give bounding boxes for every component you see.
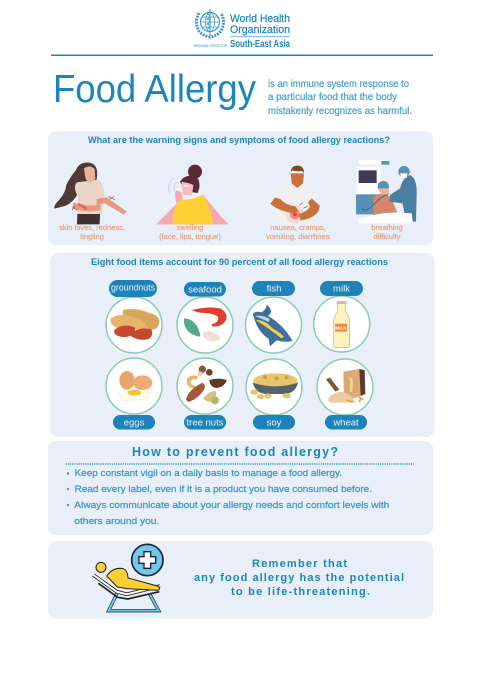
header: WHO logo: REGIONAL OFFICE FOR <box>194 44 227 48</box>
food labels: tree nuts <box>187 418 224 428</box>
symptom labels: (face, lips, tongue) <box>159 232 221 241</box>
symptom labels: difficulty <box>374 232 401 241</box>
header: WHO logo: Organization <box>230 24 290 36</box>
panel: prevention <box>48 441 433 535</box>
symptom labels: tingling <box>80 232 104 241</box>
icon: milk bottle: MILK <box>335 325 347 330</box>
reminder text: to be life-threatening. <box>231 586 370 598</box>
food labels: fish <box>267 284 281 294</box>
icon: groundnuts <box>110 309 159 340</box>
food labels: soy <box>267 418 282 428</box>
food labels <box>111 282 359 428</box>
illustration: man with stomach cramps <box>270 166 320 224</box>
food circles <box>106 296 373 415</box>
icon: tree nuts <box>186 366 227 404</box>
prevention list: others around you. <box>74 516 159 527</box>
food pills <box>109 280 367 430</box>
symptom labels: breathing <box>371 223 403 232</box>
title: Food Allergy <box>53 68 256 111</box>
header: WHO logo: World Health <box>230 13 290 25</box>
food labels: wheat <box>332 418 359 428</box>
definition text <box>268 79 412 117</box>
icon: fish <box>253 305 293 346</box>
icon: wheat <box>326 369 365 403</box>
prevention list: Keep constant vigil on a daily basis to manage a food allergy. <box>75 468 342 479</box>
definition text: mistakenly recognizes as harmful. <box>268 106 412 117</box>
prevention list: Read every label, even if it is a product you have consumed before. <box>75 484 372 495</box>
icon: seafood <box>184 307 227 342</box>
symptom labels <box>59 223 403 241</box>
illustration: woman with swelling <box>156 165 229 224</box>
illustration: patient with breathing difficulty <box>356 160 417 223</box>
panel: symptoms <box>48 131 433 246</box>
reminder text: Remember that <box>252 558 347 570</box>
icon: soy bowl <box>250 373 298 399</box>
icon: patient on medical lounger <box>93 544 163 611</box>
icon: eggs <box>118 371 152 401</box>
icon: WHO emblem <box>196 9 224 37</box>
illustration: woman with skin hives <box>54 163 127 224</box>
symptoms heading: What are the warning signs and symptoms of food allergy reactions? <box>88 135 390 146</box>
panel: reminder <box>48 541 433 618</box>
food labels: groundnuts <box>111 282 155 294</box>
prevention list <box>67 468 389 527</box>
food labels: milk <box>333 284 350 294</box>
symptom labels: vomiting, diarrhoea <box>266 232 331 241</box>
reminder text <box>194 558 404 598</box>
prevention heading: How to prevent food allergy? <box>132 445 338 459</box>
food labels: eggs <box>124 418 145 428</box>
header: WHO logo: South-East Asia <box>230 39 290 50</box>
food items heading: Eight food items account for 90 percent of all food allergy reactions <box>91 257 388 267</box>
symptom labels: swelling <box>177 223 203 232</box>
icon: milk bottle <box>334 301 350 348</box>
symptom labels: nausea, cramps, <box>270 223 326 232</box>
food labels: seafood <box>188 284 222 296</box>
symptom labels: skin hives, redness, <box>59 223 125 232</box>
definition text: is an immune system response to <box>268 79 409 90</box>
prevention list: Always communicate about your allergy needs and comfort levels with <box>74 500 389 511</box>
definition text: a particular food that the body <box>268 92 397 103</box>
panel: food items <box>50 253 434 437</box>
reminder text: any food allergy has the potential <box>194 572 404 584</box>
header: WHO logo <box>194 9 290 50</box>
